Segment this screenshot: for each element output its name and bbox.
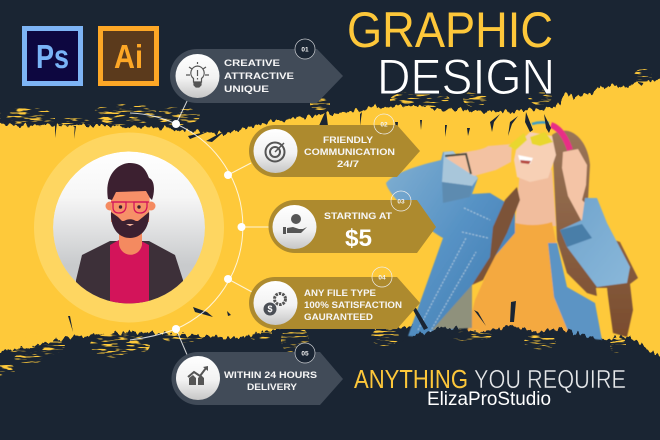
pill 1 xyxy=(170,39,343,103)
jacket left xyxy=(386,151,515,340)
icon: Photoshop logo: Ps xyxy=(36,38,69,75)
navy splatter marks xyxy=(55,110,518,332)
connector nodes xyxy=(172,120,246,333)
yellow brush band xyxy=(0,80,660,358)
pill 1: UNIQUE xyxy=(224,84,269,95)
avatar ring xyxy=(34,132,224,322)
title: GRAPHIC: GRAPHIC xyxy=(347,2,553,58)
pill 2: COMMUNICATION xyxy=(304,147,395,158)
beard xyxy=(111,212,149,238)
woman photo xyxy=(386,122,638,340)
cuff xyxy=(442,151,478,186)
icon: growth chart xyxy=(188,366,208,385)
badge: 04 xyxy=(378,274,386,282)
icon: Photoshop logo xyxy=(22,26,83,86)
pill 5 xyxy=(172,343,343,405)
title: DESIGN: DESIGN xyxy=(377,49,555,105)
hair xyxy=(107,163,154,200)
icon: target xyxy=(266,142,284,162)
bottom brush overlap xyxy=(396,326,660,376)
left hair strand xyxy=(472,187,520,285)
text: CREATIVE xyxy=(224,58,280,69)
icon: hand with dollar coin xyxy=(283,214,307,234)
badge xyxy=(391,191,411,211)
pill 2 xyxy=(249,114,420,177)
icon: gear and dollar: $ xyxy=(267,304,273,314)
back hair xyxy=(552,131,638,337)
badge xyxy=(295,343,315,363)
navy streaks on shirt xyxy=(412,301,516,330)
icon: light bulb xyxy=(186,62,209,87)
studio name: ElizaProStudio xyxy=(427,389,551,410)
badge: 01 xyxy=(301,46,309,54)
icon: Illustrator logo: Ai xyxy=(114,38,143,75)
right sleeve xyxy=(560,198,630,287)
ears xyxy=(106,202,111,210)
sunglasses xyxy=(508,132,553,150)
left forearm and hand xyxy=(446,144,512,176)
badge xyxy=(295,39,315,59)
text: WITHIN 24 HOURS xyxy=(224,370,317,381)
pill 4 xyxy=(249,267,420,329)
pill 3: $5 xyxy=(345,225,372,252)
badge: 02 xyxy=(380,122,388,128)
icon: gear and dollar xyxy=(264,294,286,316)
neck and chest xyxy=(515,170,556,226)
tagline: YOU REQUIRE xyxy=(474,364,626,394)
shirt xyxy=(110,240,149,310)
badge xyxy=(372,267,392,287)
badge xyxy=(374,114,394,134)
badge: 03 xyxy=(397,198,405,206)
headband xyxy=(551,125,570,150)
t-shirt xyxy=(465,222,570,340)
icon: Illustrator logo xyxy=(98,26,159,86)
jacket right front xyxy=(548,243,602,340)
stitching xyxy=(418,208,626,340)
face xyxy=(514,132,556,182)
yellow splatter on navy xyxy=(0,69,652,377)
navy hair splashes xyxy=(525,112,551,133)
pill 4: GAURANTEED xyxy=(304,312,373,323)
right hand xyxy=(562,149,590,222)
text: FRIENDLY xyxy=(323,135,374,146)
arc connector xyxy=(130,113,243,340)
text: ANY FILE TYPE xyxy=(304,288,376,299)
tagline: ANYTHING xyxy=(354,364,468,394)
face xyxy=(111,188,150,222)
mouth xyxy=(518,155,533,164)
jacket xyxy=(76,241,183,304)
avatar xyxy=(53,152,205,320)
pill 1: ATTRACTIVE xyxy=(224,71,294,82)
text: STARTING AT xyxy=(324,211,392,222)
pill 5: DELIVERY xyxy=(247,382,298,393)
lining xyxy=(432,285,472,330)
pill 2: 24/7 xyxy=(337,159,359,170)
neck xyxy=(119,232,142,255)
badge: 05 xyxy=(301,350,309,358)
pill 3 xyxy=(268,191,436,253)
connector lines xyxy=(176,97,270,357)
tagline xyxy=(354,364,626,394)
glasses xyxy=(111,202,149,213)
pill 4: 100% SATISFACTION xyxy=(304,300,402,311)
